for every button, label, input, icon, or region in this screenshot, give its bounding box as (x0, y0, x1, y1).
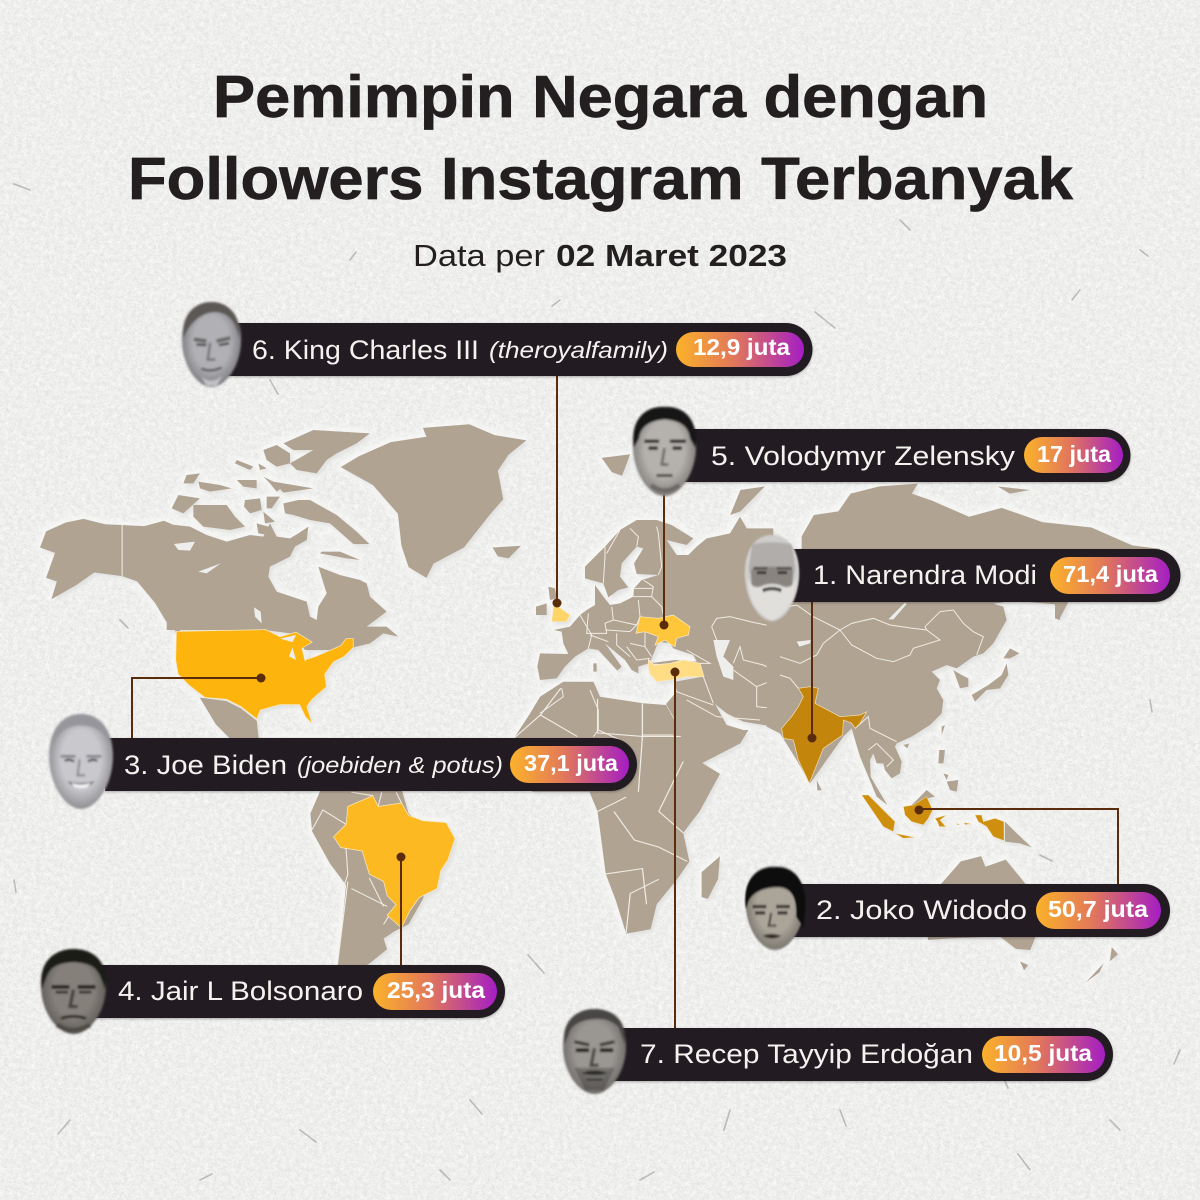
lake and river marks (797, 603, 907, 647)
great lakes over usa (280, 635, 310, 662)
usa (176, 630, 353, 724)
title: Followers Instagram Terbanyak (128, 146, 1073, 212)
portrait: Biden (49, 714, 113, 809)
label: Joe Biden: 37,1 juta (524, 750, 618, 776)
label: King Charles III (182, 302, 812, 387)
tasmania and new zealand (1020, 947, 1118, 983)
european and central asian borders (580, 527, 773, 720)
canada and arctic islands (167, 430, 398, 650)
title (128, 64, 1073, 212)
label: Jair L Bolsonaro: 25,3 juta (387, 977, 485, 1003)
turkey (648, 659, 704, 682)
mexico (200, 697, 326, 746)
south america land (310, 789, 441, 970)
label: Joko Widodo (745, 867, 1170, 950)
connector lines (132, 376, 1118, 1028)
indonesia (862, 795, 1004, 841)
asian borders (780, 605, 983, 767)
label: Volodymyr Zelensky: 5. Volodymyr Zelensky (711, 441, 1016, 471)
korea (953, 670, 968, 688)
africa land (510, 682, 720, 934)
label: Joe Biden: 3. Joe Biden (124, 750, 287, 780)
brazil (334, 796, 455, 928)
label: Jair L Bolsonaro (41, 949, 505, 1034)
label: Jair L Bolsonaro: 4. Jair L Bolsonaro (118, 976, 363, 1006)
portrait: Modi (745, 535, 799, 621)
label: Volodymyr Zelensky: 17 juta (1037, 441, 1111, 467)
alaska and western canada (40, 519, 180, 639)
label: Narendra Modi: 71,4 juta (1063, 561, 1158, 587)
african north borders (540, 688, 673, 740)
portrait: Bolsonaro (41, 949, 106, 1034)
title: Pemimpin Negara dengan (213, 64, 988, 130)
label: Joe Biden (49, 714, 637, 809)
greenland, iceland, mexico, south america (176, 424, 526, 970)
label: Recep Tayyip Erdogan (563, 1009, 1113, 1094)
label: Joe Biden: (joebiden & potus) (297, 752, 503, 778)
alaska border (121, 525, 124, 576)
label: Narendra Modi: 1. Narendra Modi (813, 560, 1037, 590)
northern siberia, africa, oceania (510, 454, 1160, 983)
ukraine (636, 615, 690, 647)
subtitle: date: Data per (413, 238, 545, 273)
lakes (174, 534, 329, 642)
africa borders (514, 688, 687, 933)
india (782, 687, 867, 783)
papua new guinea (1005, 822, 1032, 847)
connector dots (256, 598, 924, 862)
east asia (767, 597, 1060, 847)
portrait: King Charles (182, 302, 241, 387)
portrait: Zelensky (633, 407, 696, 496)
mediterranean islands and british isles (536, 587, 597, 672)
subtitle: date: 02 Maret 2023 (556, 238, 787, 273)
label: Joko Widodo: 2. Joko Widodo (816, 895, 1027, 925)
subtitle: date (413, 238, 787, 273)
label: King Charles III: 12,9 juta (693, 334, 790, 360)
south america borders (312, 792, 401, 967)
australia (920, 856, 1047, 950)
label: Joko Widodo: 50,7 juta (1048, 896, 1148, 922)
label: King Charles III: (theroyalfamily) (489, 337, 668, 363)
label: King Charles III: 6. King Charles III (252, 335, 479, 365)
portrait: Jokowi (745, 867, 805, 950)
world map (40, 424, 1160, 983)
label: Narendra Modi (745, 535, 1180, 621)
europe and western asia (536, 517, 773, 767)
label: Volodymyr Zelensky (633, 407, 1130, 496)
label: Recep Tayyip Erdogan: 10,5 juta (994, 1040, 1092, 1066)
label: Recep Tayyip Erdogan: 7. Recep Tayyip Erdoğan (640, 1039, 973, 1069)
asian islands (817, 603, 1060, 807)
uk (552, 607, 570, 622)
madagascar (702, 856, 720, 899)
portrait: Erdogan (563, 1009, 626, 1094)
caspian sea (713, 640, 733, 680)
